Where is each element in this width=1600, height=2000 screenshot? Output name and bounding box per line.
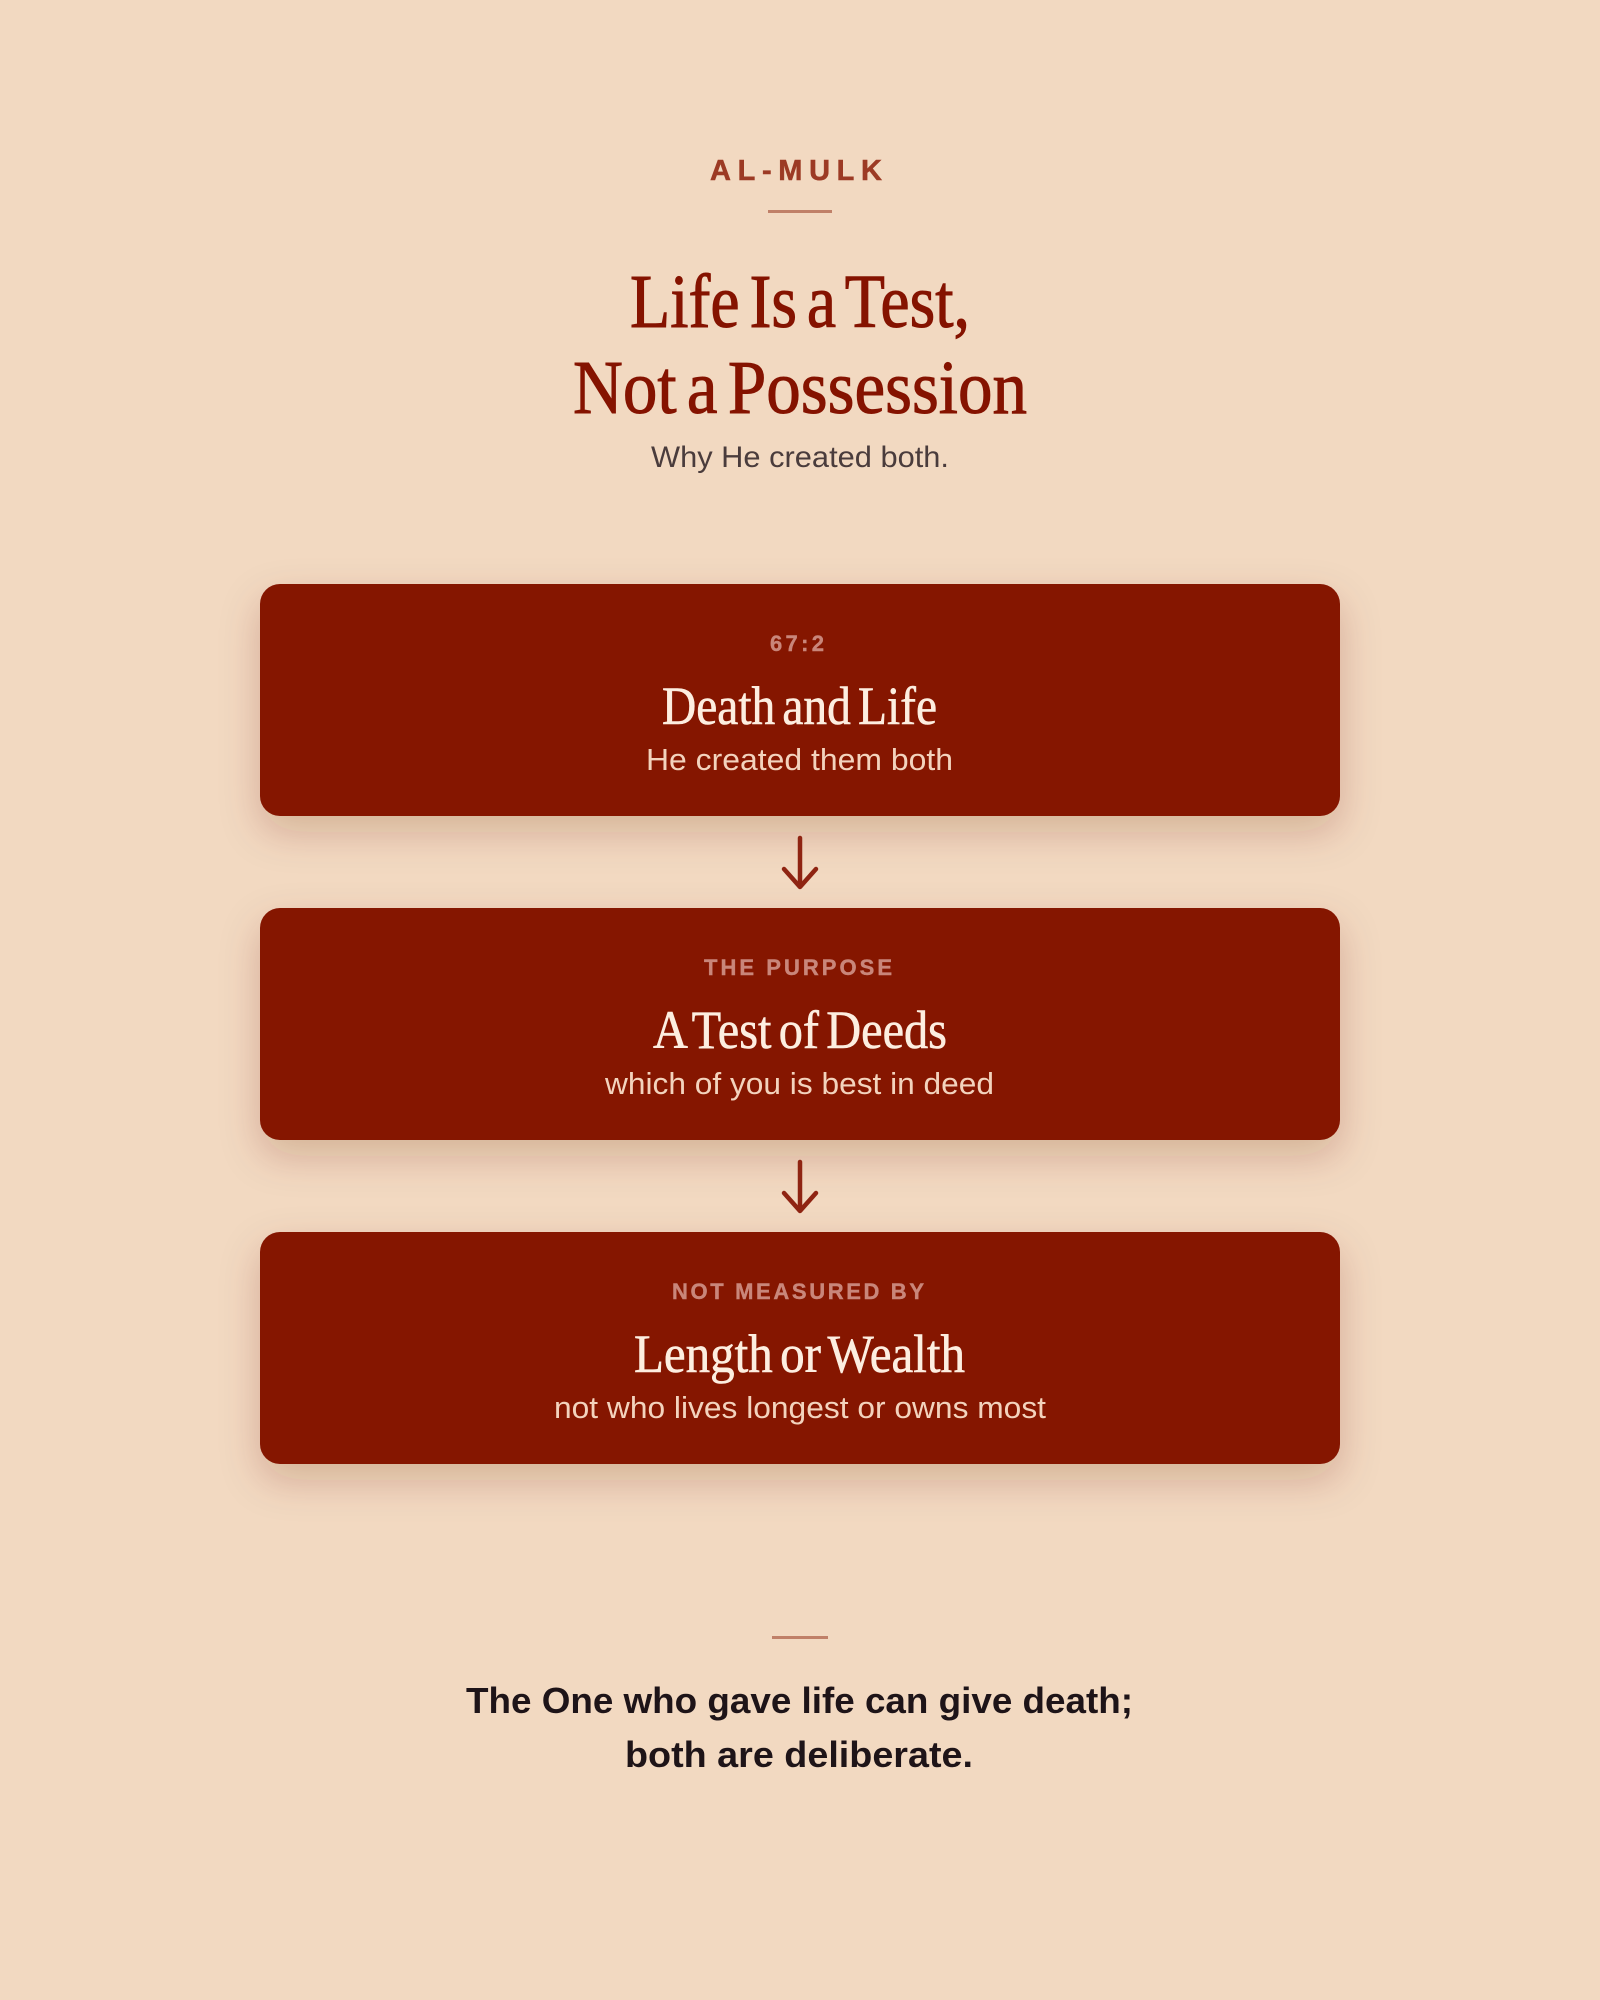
header (573, 155, 1027, 474)
card description: He created them both (646, 742, 953, 777)
eyebrow label: AL-MULK (710, 155, 882, 187)
closing statement (466, 1680, 1133, 1775)
card: death and life (260, 584, 1340, 816)
closing statement: both are deliberate. (625, 1734, 973, 1775)
card description: which of you is best in deed (604, 1066, 994, 1101)
closing statement: The One who gave life can give death; (466, 1680, 1133, 1721)
card label: NOT MEASURED BY (672, 1279, 924, 1304)
title (573, 260, 1027, 430)
title: Not a Possession (573, 346, 1027, 430)
arrow 1 (784, 838, 816, 887)
arrow 2 (784, 1162, 816, 1211)
title: Life Is a Test, (630, 260, 970, 344)
card: a test of deeds (260, 908, 1340, 1140)
card label: 67:2 (770, 631, 824, 656)
card description: not who lives longest or owns most (554, 1390, 1046, 1425)
card label: THE PURPOSE (704, 955, 892, 980)
card: length or wealth (260, 1232, 1340, 1464)
card heading: A Test of Deeds (653, 1000, 947, 1060)
header rule (768, 210, 832, 213)
card heading: Length or Wealth (634, 1324, 965, 1384)
subtitle: Why He created both. (651, 441, 949, 474)
card heading: Death and Life (662, 676, 937, 736)
footer (466, 1636, 1133, 1775)
footer rule (772, 1636, 828, 1639)
